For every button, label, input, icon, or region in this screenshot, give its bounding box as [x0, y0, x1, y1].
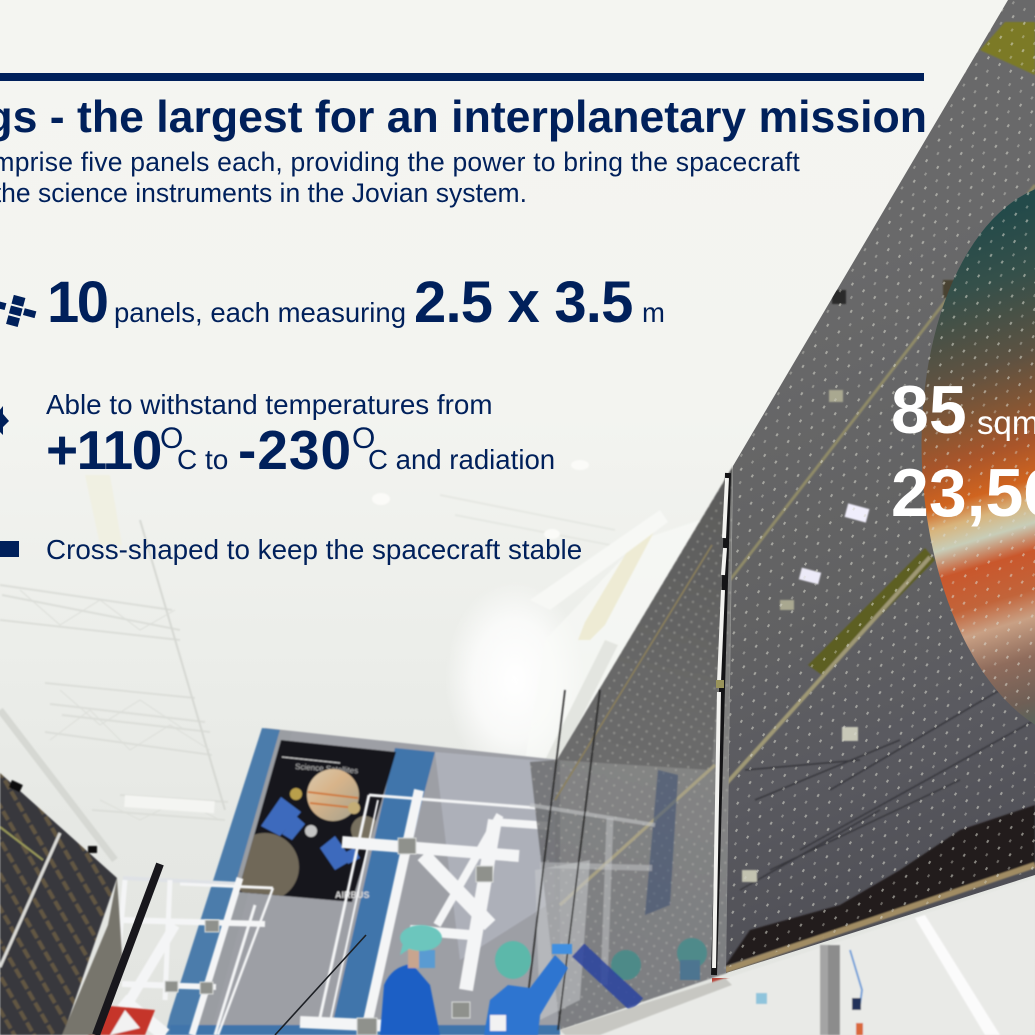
stat: temperature range: C to: [177, 444, 228, 475]
left solar wing section (second panel): [530, 466, 733, 1030]
black cable: [275, 935, 366, 1035]
stat: temperature range: -230: [238, 419, 352, 481]
stat: panels count and size: m: [642, 297, 665, 328]
poster: [231, 740, 396, 902]
hall ceiling trusses and glow: [0, 460, 700, 860]
intro text: [0, 147, 800, 208]
stat: temperature range: O: [352, 422, 375, 455]
frame brackets: [165, 838, 493, 1035]
stat: temperature range: C and radiation: [368, 444, 555, 475]
photo: back wall with poster and blue stripes: [165, 728, 560, 1035]
planet Jupiter composite: [922, 189, 1035, 724]
central strut: [712, 473, 730, 984]
photo: white support frames: [118, 790, 550, 1035]
stat: panels count and size: 2.5 x 3.5: [414, 270, 633, 335]
icon: sun / temperature: [0, 404, 9, 438]
red safety marking: [88, 1006, 155, 1035]
stat: panels count and size: [47, 270, 665, 335]
horizontal rule: [0, 73, 924, 81]
stat: temperature range: [46, 389, 555, 481]
main solar wing: [725, 0, 1035, 973]
stat: panels count and size: 10: [47, 270, 107, 335]
icon: solar wing cross: [0, 290, 39, 331]
crack marks: [740, 690, 1035, 890]
stat: wing area: [891, 372, 1035, 448]
cross-shaped statement: Cross-shaped to keep the spacecraft stable: [46, 534, 582, 565]
stat: panels count and size: panels, each measuring: [114, 297, 406, 328]
poster: Science Satellites: [295, 762, 358, 775]
diagonal ribs: [730, 185, 1035, 580]
upper right olive corner: [980, 22, 1035, 75]
stat: temperature range: O: [160, 422, 183, 455]
worker left: [380, 925, 442, 1035]
icon: square bullet: [0, 541, 19, 557]
lower-left solar panel: [0, 773, 122, 1035]
black vertical pole: [96, 864, 160, 1035]
reflection in glass panel: [525, 690, 707, 1030]
worker right: [484, 941, 572, 1035]
stat: temperature range: Able to withstand temperatures from: [46, 389, 493, 420]
base border: [725, 865, 1035, 970]
stat: wing area: 85: [891, 372, 967, 448]
dark band at base of wing: [725, 805, 1035, 966]
hot spots: [845, 503, 869, 523]
wing dot grid: [726, 0, 1035, 968]
intro text: the science instruments in the Jovian system.: [0, 178, 527, 208]
stat: temperature range: +110: [46, 419, 161, 481]
poster: AIRBUS: [335, 890, 370, 900]
floor and equipment under the wing: [560, 878, 1035, 1035]
olive strip: [808, 548, 935, 675]
